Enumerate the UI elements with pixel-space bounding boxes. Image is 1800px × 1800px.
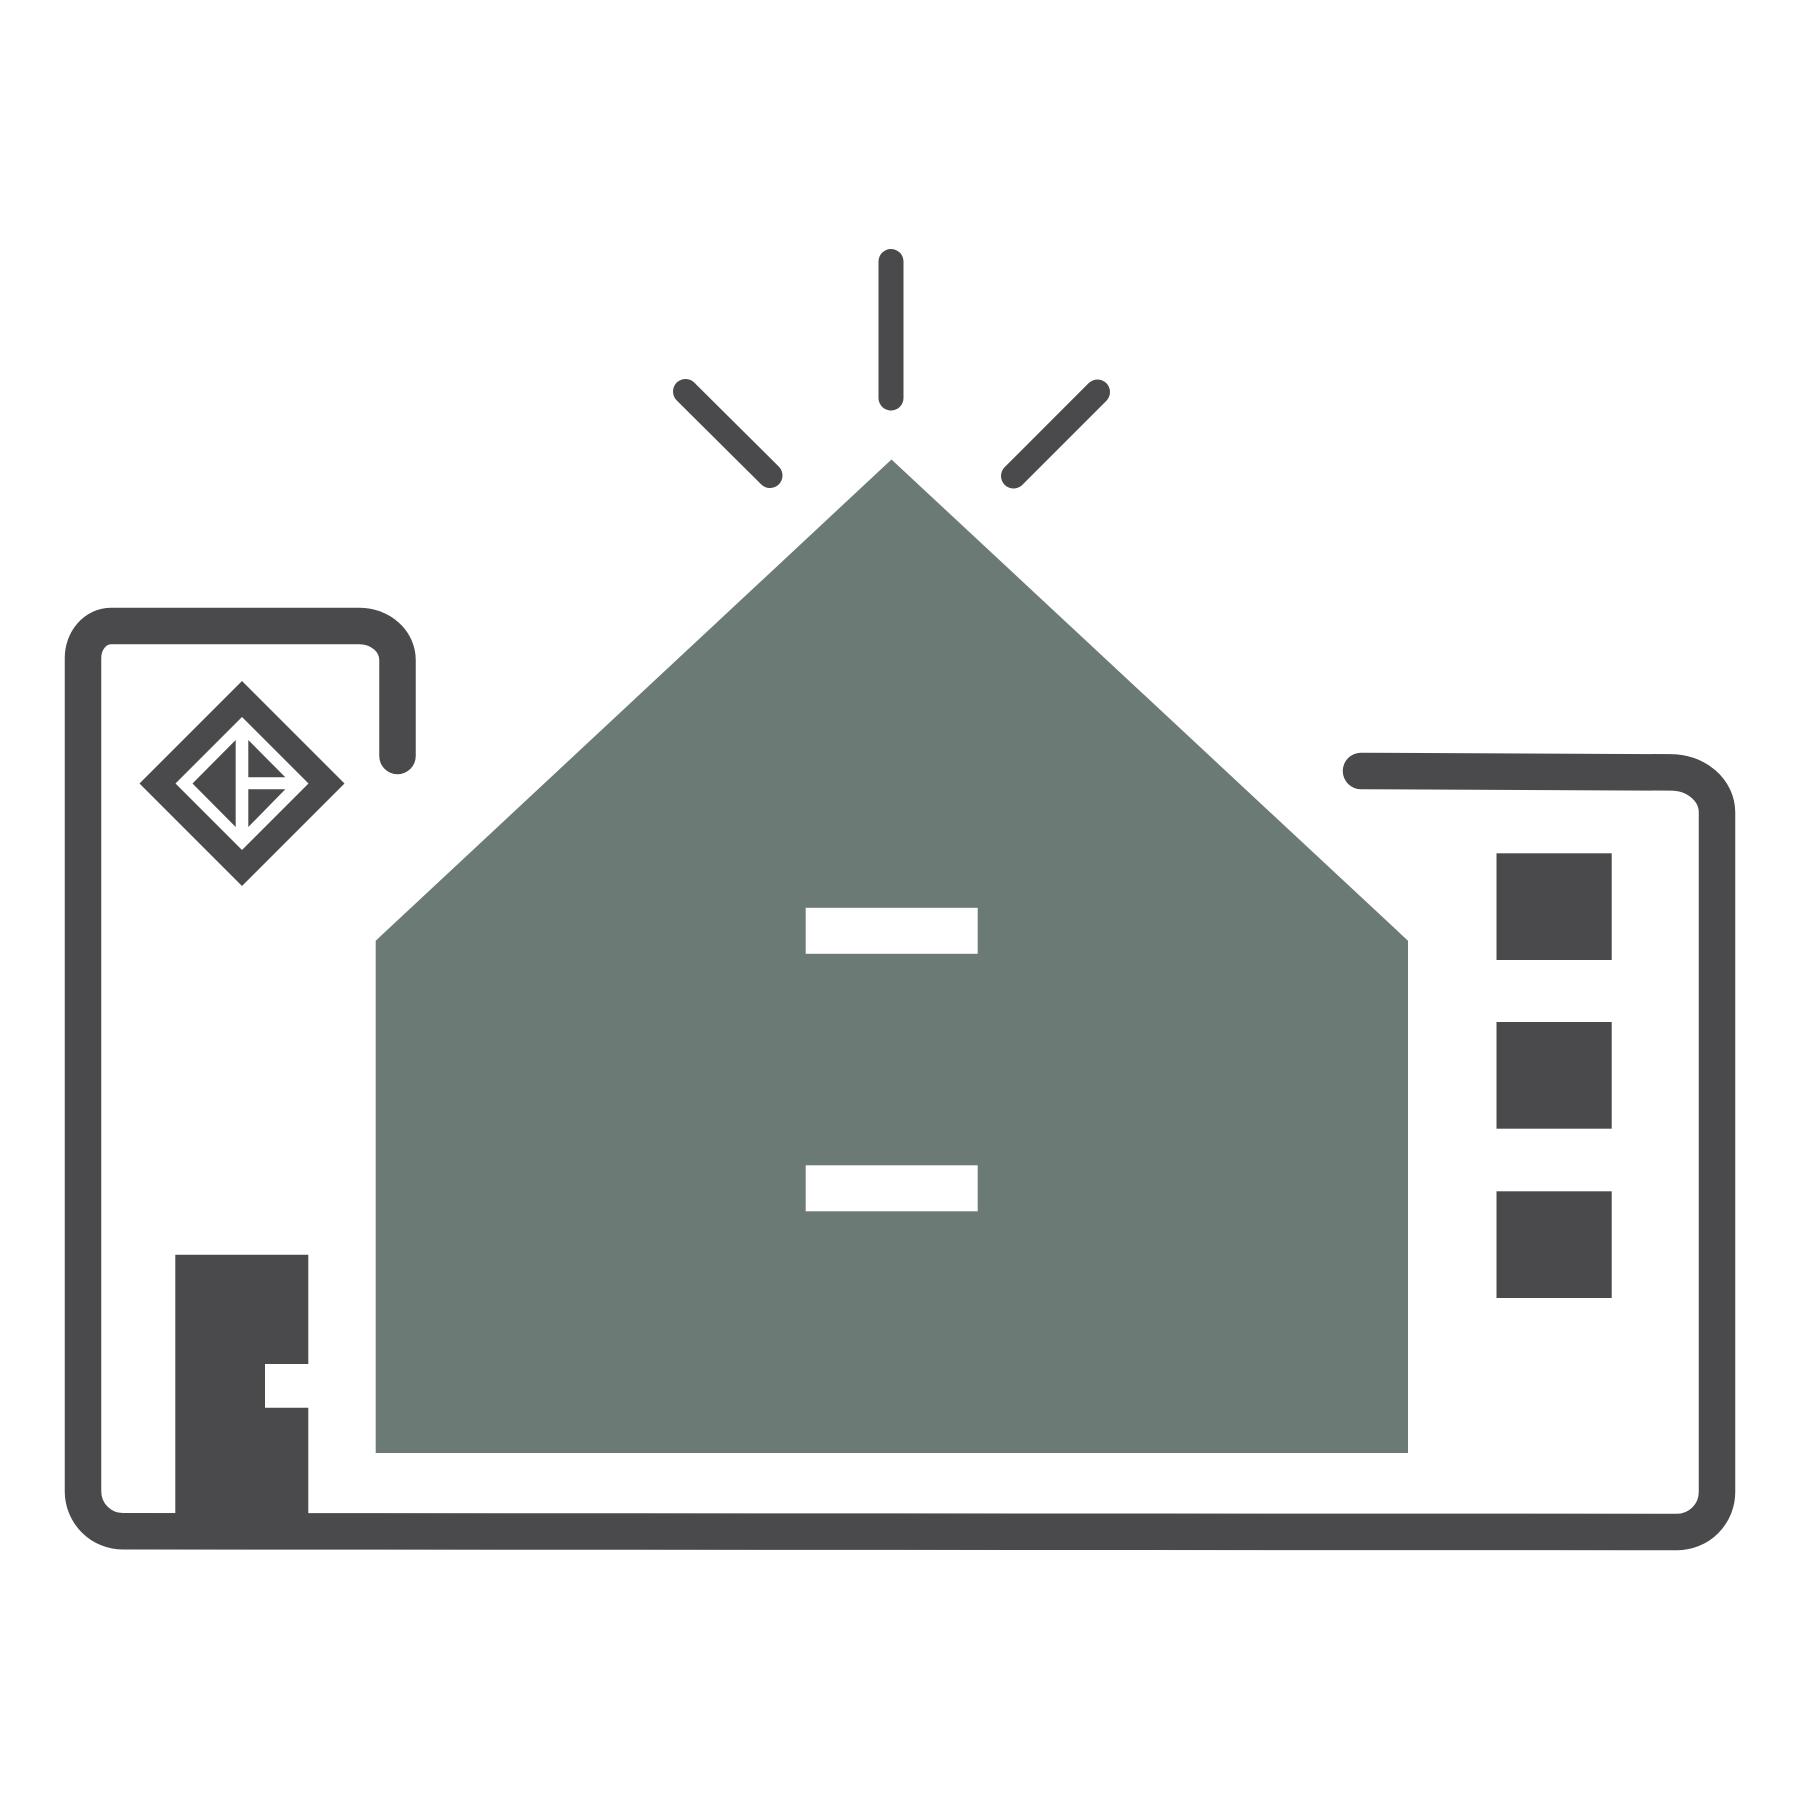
rays above roof [686, 262, 1098, 476]
side window column [1496, 853, 1612, 1298]
left triangle [192, 740, 236, 827]
door [175, 1255, 308, 1535]
upper window [806, 908, 978, 954]
middle square [1496, 1022, 1612, 1129]
house body [376, 460, 1408, 1453]
outline surrounding the house [83, 626, 1717, 1532]
bottom square [1496, 1191, 1612, 1298]
right ray [1014, 392, 1098, 476]
upper right triangle [248, 740, 285, 777]
top square [1496, 853, 1612, 960]
lower right triangle [248, 789, 285, 827]
lower window [806, 1165, 978, 1211]
diamond logo [140, 681, 344, 886]
diamond frame [140, 681, 344, 886]
centre ray [878, 262, 904, 398]
left ray [686, 392, 770, 476]
house silhouette with windows [376, 460, 1408, 1453]
